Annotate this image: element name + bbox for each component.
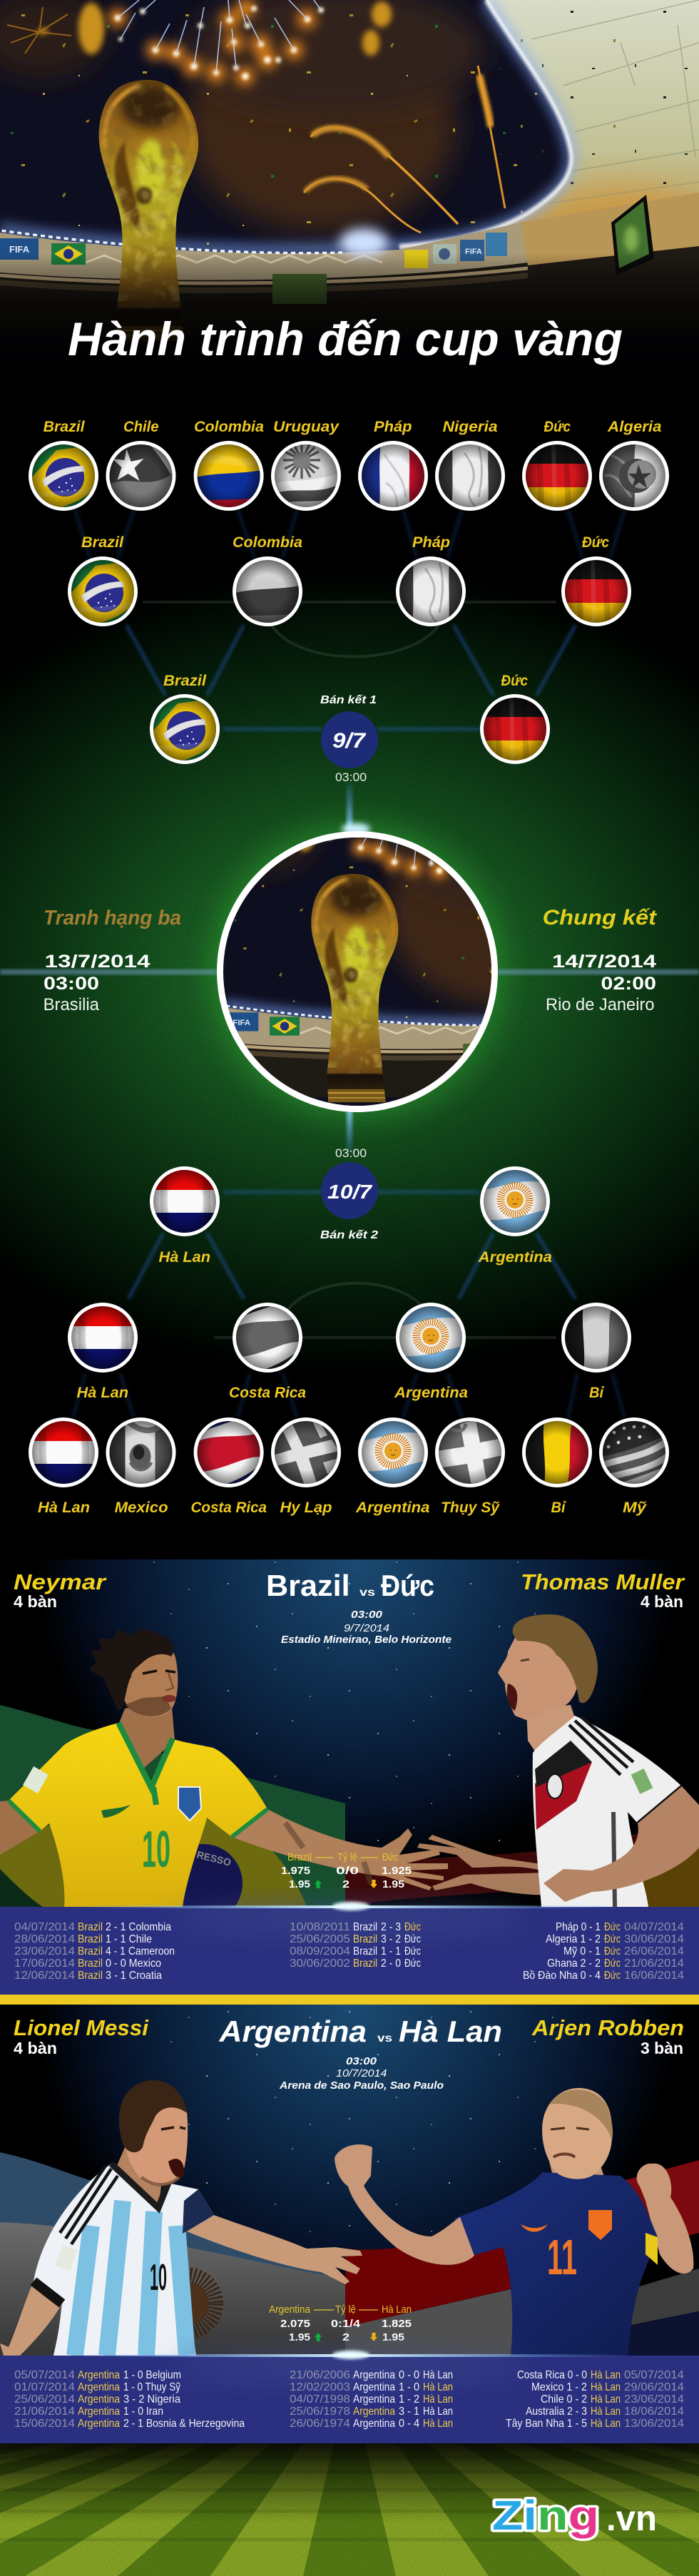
arrow up — [315, 2333, 322, 2341]
quarter-finalists bottom — [68, 1303, 631, 1401]
team: Brazil: Brazil — [44, 419, 86, 435]
head to head: 3 - 2 — [381, 1933, 401, 1945]
team: Brazil — [29, 419, 98, 511]
odds table: 1.95 — [289, 2331, 310, 2343]
match title — [266, 1569, 434, 1602]
Hà Lan recent results: Hà Lan — [591, 2393, 621, 2406]
team: Argentina — [478, 1166, 552, 1266]
team: Pháp: Pháp — [412, 534, 450, 551]
name: Lionel Messi — [14, 2015, 149, 2057]
Hà Lan recent results: Australia 2 - 3 — [526, 2406, 587, 2418]
yellow divider band — [0, 1995, 699, 2005]
odds table: 1.95 — [382, 1878, 404, 1890]
team: Argentina: Argentina — [478, 1249, 552, 1266]
player photo: Arjen Robben — [335, 2088, 693, 2356]
match title: vs — [359, 1587, 375, 1599]
odds table: 2 — [342, 1878, 350, 1890]
heading: Tranh hạng ba: Tranh hạng ba — [44, 907, 181, 930]
player photo: Lionel Messi — [0, 2080, 362, 2356]
team: Đức: Đức — [582, 534, 609, 551]
head to head: 1 - 2 — [399, 2393, 419, 2406]
team: Bỉ — [522, 1417, 592, 1516]
backdrop — [0, 2005, 699, 2356]
odds table: 0/0 — [336, 1865, 359, 1877]
head to head: Brazil — [353, 1933, 377, 1945]
Brazil recent results: Brazil — [78, 1933, 103, 1945]
Brazil recent results: Brazil — [78, 1970, 103, 1982]
Brazil recent results: 0 - 0 Mexico — [106, 1958, 161, 1970]
head to head: 25/06/1978 — [290, 2406, 350, 2418]
Argentina recent results — [14, 2369, 245, 2430]
team: Argentina: Argentina — [355, 1500, 430, 1516]
odds table: Argentina — [269, 2303, 311, 2316]
team: Hà Lan — [150, 1166, 220, 1266]
name: Lionel Messi: Lionel Messi — [14, 2015, 149, 2040]
odds table: 2 — [342, 2331, 350, 2343]
head to head: Hà Lan — [423, 2369, 453, 2381]
head to head: 0 - 4 — [399, 2418, 419, 2430]
Đức recent results: Đức — [604, 1933, 621, 1945]
head to head: 04/07/1998 — [290, 2393, 350, 2406]
backdrop: RESSO — [195, 1848, 233, 1868]
team: Colombia — [194, 419, 264, 511]
head to head: 12/02/2003 — [290, 2381, 350, 2393]
odds table: 1.825 — [382, 2318, 412, 2330]
name: Lionel Messi: 4 bàn — [14, 2039, 57, 2057]
Hà Lan recent results: Chile 0 - 2 — [541, 2393, 587, 2406]
match title: vs — [377, 2032, 392, 2045]
team: Brazil: Brazil — [163, 673, 207, 689]
team: Costa Rica: Costa Rica — [229, 1385, 306, 1401]
Argentina recent results: 1 - 0 Thụy Sỹ — [123, 2381, 180, 2393]
date: 13/7/2014 — [44, 952, 150, 972]
Argentina recent results: 1 - 0 Iran — [123, 2406, 163, 2418]
player photo: Neymar: 10 — [142, 1821, 170, 1878]
backdrop — [0, 1559, 699, 1923]
match title: Argentina — [218, 2015, 367, 2048]
team: Chile: Chile — [123, 419, 159, 435]
Argentina recent results: 21/06/2014 — [14, 2406, 75, 2418]
team: Brazil: Brazil — [81, 534, 124, 551]
match details: 03:00 — [351, 1609, 383, 1621]
Đức recent results: Ghana 2 - 2 — [547, 1958, 601, 1970]
Argentina recent results: 15/06/2014 — [14, 2418, 75, 2430]
final info — [543, 906, 658, 1014]
venue: Rio de Janeiro — [546, 995, 655, 1014]
label: Bán kết 1: Bán kết 1 — [320, 694, 377, 706]
team: Colombia: Colombia — [194, 419, 264, 435]
arrow down — [370, 2333, 377, 2341]
head to head: 2 - 0 — [381, 1958, 401, 1970]
head to head: Đức — [404, 1945, 421, 1958]
results panel: Argentina vs Hà Lan — [0, 2351, 699, 2443]
match details — [281, 1609, 451, 1646]
team: Bỉ: Bỉ — [551, 1500, 567, 1516]
Brazil recent results — [14, 1921, 175, 1982]
Argentina recent results: 3 - 2 Nigeria — [123, 2393, 180, 2406]
logo: Zing.vn: Zing — [492, 2493, 599, 2539]
player photo: Lionel Messi: 10 — [150, 2257, 167, 2298]
venue: Brasilia — [44, 995, 100, 1014]
team: Pháp: Pháp — [374, 419, 412, 435]
Argentina recent results: Argentina — [78, 2406, 120, 2418]
odds table: Đức — [382, 1851, 398, 1863]
team: Bỉ — [561, 1303, 631, 1401]
Brazil recent results: 2 - 1 Colombia — [106, 1921, 171, 1933]
heading: Chung kết: Chung kết — [543, 906, 658, 930]
Argentina recent results: Argentina — [78, 2418, 120, 2430]
odds table: Brazil — [287, 1851, 312, 1863]
panel: grass pitch bracket background — [0, 399, 699, 1555]
Hà Lan recent results: 23/06/2014 — [624, 2393, 684, 2406]
Brazil recent results: 3 - 1 Croatia — [106, 1970, 162, 1982]
match title: Brazil — [266, 1569, 350, 1602]
semi-final 1 — [150, 673, 550, 784]
Hà Lan recent results: 13/06/2014 — [624, 2418, 684, 2430]
head to head — [290, 2369, 453, 2430]
team: Hy Lạp: Hy Lạp — [280, 1500, 332, 1516]
team: Đức — [522, 419, 592, 511]
Hà Lan recent results — [506, 2369, 684, 2430]
logo: Zing.vn: .vn — [606, 2498, 657, 2538]
head to head: 21/06/2006 — [290, 2369, 350, 2381]
head to head: Hà Lan — [423, 2393, 453, 2406]
Brazil recent results: 04/07/2014 — [14, 1921, 75, 1933]
Argentina recent results: Argentina — [78, 2369, 120, 2381]
date badge 9/7: 9/7 — [332, 729, 366, 753]
Đức recent results — [523, 1921, 684, 1982]
head to head: Đức — [404, 1921, 421, 1933]
player photo: Thomas Muller — [417, 1614, 699, 1907]
match title: Đức — [381, 1569, 434, 1602]
player photo: Neymar — [0, 1628, 448, 1907]
results panel — [0, 1902, 699, 1995]
Argentina recent results: Argentina — [78, 2381, 120, 2393]
panel: Brazil vs Đức match preview — [0, 1559, 699, 1995]
third place info — [44, 907, 181, 1014]
head to head — [290, 1921, 421, 1970]
team: Algeria — [599, 419, 669, 511]
date badge 9/7 — [321, 711, 378, 768]
head to head: 30/06/2002 — [290, 1958, 350, 1970]
team: Hy Lạp — [271, 1417, 341, 1516]
Đức recent results: Mỹ 0 - 1 — [563, 1945, 601, 1958]
team: Colombia: Colombia — [233, 534, 302, 551]
name: Thomas Muller — [521, 1569, 685, 1611]
Hà Lan recent results: 18/06/2014 — [624, 2406, 684, 2418]
head to head: Đức — [404, 1933, 421, 1945]
odds table: 0:1/4 — [331, 2318, 361, 2330]
Brazil recent results: Brazil — [78, 1945, 103, 1958]
Hà Lan recent results: Hà Lan — [591, 2418, 621, 2430]
team: Brazil — [150, 673, 220, 764]
team: Costa Rica — [229, 1303, 306, 1401]
Đức recent results: Đức — [604, 1958, 621, 1970]
player photo: Arjen Robben: 11 — [547, 2229, 577, 2285]
Brazil recent results: 28/06/2014 — [14, 1933, 75, 1945]
head to head: 1 - 0 — [399, 2381, 419, 2393]
name: Neymar: 4 bàn — [14, 1592, 57, 1611]
Hà Lan recent results: Costa Rica 0 - 0 — [517, 2369, 587, 2381]
logo: Zing.vn — [492, 2493, 657, 2539]
head to head: Argentina — [353, 2381, 395, 2393]
team: Hà Lan: Hà Lan — [38, 1500, 90, 1516]
head to head: Hà Lan — [423, 2406, 453, 2418]
odds table — [281, 1851, 412, 1890]
head to head: 3 - 1 — [399, 2406, 419, 2418]
team: Thụy Sỹ — [435, 1417, 505, 1516]
team: Argentina — [394, 1303, 468, 1401]
Brazil recent results: 23/06/2014 — [14, 1945, 75, 1958]
team: Costa Rica: Costa Rica — [191, 1500, 267, 1516]
name: Thomas Muller: Thomas Muller — [521, 1569, 685, 1594]
Đức recent results: Đức — [604, 1970, 621, 1982]
head to head: 08/09/2004 — [290, 1945, 350, 1958]
bottom grass field — [0, 2376, 699, 2576]
Brazil recent results: 12/06/2014 — [14, 1970, 75, 1982]
Đức recent results: 21/06/2014 — [624, 1958, 684, 1970]
odds table: 1.925 — [382, 1865, 412, 1877]
time: 03:00 — [44, 974, 99, 994]
name: Arjen Robben: 3 bàn — [641, 2039, 683, 2057]
head to head: 26/06/1974 — [290, 2418, 350, 2430]
match details: 03:00 — [346, 2055, 377, 2067]
odds table — [269, 2303, 412, 2343]
Brazil recent results: 17/06/2014 — [14, 1958, 75, 1970]
team: Đức — [561, 534, 631, 626]
head to head: Argentina — [353, 2418, 395, 2430]
kickoff time: 03:00 — [335, 1146, 367, 1160]
match details — [279, 2055, 444, 2092]
quarter-final row top: last sixteen teams — [29, 419, 669, 511]
head to head: Brazil — [353, 1945, 377, 1958]
date: 14/7/2014 — [552, 952, 656, 972]
team: Nigeria: Nigeria — [443, 419, 498, 435]
head to head: Đức — [404, 1958, 421, 1970]
Hà Lan recent results: 05/07/2014 — [624, 2369, 684, 2381]
header photo: stadium, fireworks and trophy — [0, 0, 699, 399]
Argentina recent results: 1 - 0 Belgium — [123, 2369, 181, 2381]
team: Brazil — [68, 534, 138, 626]
kickoff time: 03:00 — [335, 770, 367, 784]
name: Neymar: Neymar — [14, 1569, 107, 1594]
head to head: 25/06/2005 — [290, 1933, 350, 1945]
Hà Lan recent results: Hà Lan — [591, 2369, 621, 2381]
Argentina recent results: 2 - 1 Bosnia & Herzegovina — [123, 2418, 245, 2430]
team: Nigeria — [435, 419, 505, 511]
head to head: Argentina — [353, 2406, 395, 2418]
Brazil recent results: Brazil — [78, 1958, 103, 1970]
Hà Lan recent results: Hà Lan — [591, 2406, 621, 2418]
match title — [218, 2015, 502, 2048]
team: Mỹ: Mỹ — [623, 1500, 647, 1516]
Đức recent results: 30/06/2014 — [624, 1933, 684, 1945]
arrow up — [315, 1880, 322, 1888]
Đức recent results: Đức — [604, 1921, 621, 1933]
match title: Hà Lan — [399, 2015, 502, 2048]
time: 02:00 — [601, 974, 656, 994]
team: Pháp — [358, 419, 428, 511]
odds table: Tỷ lệ — [337, 1851, 357, 1863]
head to head: Hà Lan — [423, 2418, 453, 2430]
semi-final 2 — [150, 1146, 552, 1266]
Đức recent results: Algeria 1 - 2 — [546, 1933, 601, 1945]
match details: 9/7/2014 — [344, 1622, 389, 1634]
name: Arjen Robben — [531, 2015, 684, 2057]
date badge 10/7: 10/7 — [327, 1181, 373, 1203]
odds table: Tỷ lệ — [335, 2303, 356, 2316]
team: Algeria: Algeria — [607, 419, 662, 435]
Argentina recent results: 25/06/2014 — [14, 2393, 75, 2406]
team: Mexico: Mexico — [115, 1500, 168, 1516]
team: Đức: Đức — [544, 419, 571, 435]
Đức recent results: 04/07/2014 — [624, 1921, 684, 1933]
Brazil recent results: 4 - 1 Cameroon — [106, 1945, 175, 1958]
head to head: 10/08/2011 — [290, 1921, 350, 1933]
team: Colombia — [233, 534, 302, 626]
last sixteen bottom — [29, 1417, 669, 1516]
Đức recent results: Pháp 0 - 1 — [556, 1921, 601, 1933]
team: Hà Lan: Hà Lan — [77, 1385, 128, 1401]
Đức recent results: 16/06/2014 — [624, 1970, 684, 1982]
head to head: 2 - 3 — [381, 1921, 401, 1933]
head to head: Brazil — [353, 1921, 377, 1933]
team: Mỹ — [599, 1417, 669, 1516]
team: Đức — [480, 673, 550, 764]
team: Chile — [106, 419, 175, 511]
label: Bán kết 2: Bán kết 2 — [320, 1229, 378, 1241]
team: Pháp — [396, 534, 466, 626]
Hà Lan recent results: 29/06/2014 — [624, 2381, 684, 2393]
team: Argentina: Argentina — [394, 1385, 468, 1401]
head to head: Brazil — [353, 1958, 377, 1970]
odds table: 2.075 — [280, 2318, 310, 2330]
name: Neymar — [14, 1569, 107, 1611]
head to head: Argentina — [353, 2369, 395, 2381]
team: Thụy Sỹ: Thụy Sỹ — [441, 1500, 500, 1516]
team: Mexico — [106, 1417, 175, 1516]
Argentina recent results: 01/07/2014 — [14, 2381, 75, 2393]
team: Uruguay: Uruguay — [273, 419, 340, 435]
Hà Lan recent results: Tây Ban Nha 1 - 5 — [506, 2418, 587, 2430]
name: Arjen Robben: Arjen Robben — [531, 2015, 684, 2040]
match details: Arena de Sao Paulo, Sao Paulo — [279, 2079, 444, 2092]
bracket connector lines — [0, 511, 699, 1416]
Đức recent results: Đức — [604, 1945, 621, 1958]
date badge 10/7 — [321, 1162, 378, 1219]
team: Hà Lan — [29, 1417, 98, 1516]
panel: Argentina vs Hà Lan match preview — [0, 2005, 699, 2356]
Hà Lan recent results: Mexico 1 - 2 — [531, 2381, 587, 2393]
Argentina recent results: Argentina — [78, 2393, 120, 2406]
team: Hà Lan — [68, 1303, 138, 1401]
odds table: 1.95 — [289, 1878, 310, 1890]
head to head: 1 - 1 — [381, 1945, 401, 1958]
head to head: Argentina — [353, 2393, 395, 2406]
Đức recent results: 26/06/2014 — [624, 1945, 684, 1958]
odds table: 1.95 — [382, 2331, 404, 2343]
quarter-finalists top — [68, 534, 631, 626]
match details: 10/7/2014 — [336, 2067, 387, 2079]
name: Thomas Muller: 4 bàn — [641, 1592, 683, 1611]
odds table: Hà Lan — [382, 2303, 412, 2316]
team: Hà Lan: Hà Lan — [158, 1249, 210, 1266]
team: Uruguay — [271, 419, 341, 511]
team: Bỉ: Bỉ — [589, 1385, 605, 1401]
Đức recent results: Bồ Đào Nha 0 - 4 — [523, 1970, 601, 1982]
team: Costa Rica — [191, 1417, 267, 1516]
team: Argentina — [355, 1417, 430, 1516]
title: Hành trình đến cup vàng — [68, 312, 623, 365]
Brazil recent results: Brazil — [78, 1921, 103, 1933]
Brazil recent results: 1 - 1 Chile — [106, 1933, 152, 1945]
Hà Lan recent results: Hà Lan — [591, 2381, 621, 2393]
Argentina recent results: 05/07/2014 — [14, 2369, 75, 2381]
team: Đức: Đức — [501, 673, 528, 689]
central trophy medallion — [217, 831, 498, 1112]
head to head: Hà Lan — [423, 2381, 453, 2393]
arrow down — [370, 1880, 377, 1888]
head to head: 0 - 0 — [399, 2369, 419, 2381]
match details: Estadio Mineirao, Belo Horizonte — [281, 1634, 451, 1646]
odds table: 1.975 — [281, 1865, 310, 1877]
